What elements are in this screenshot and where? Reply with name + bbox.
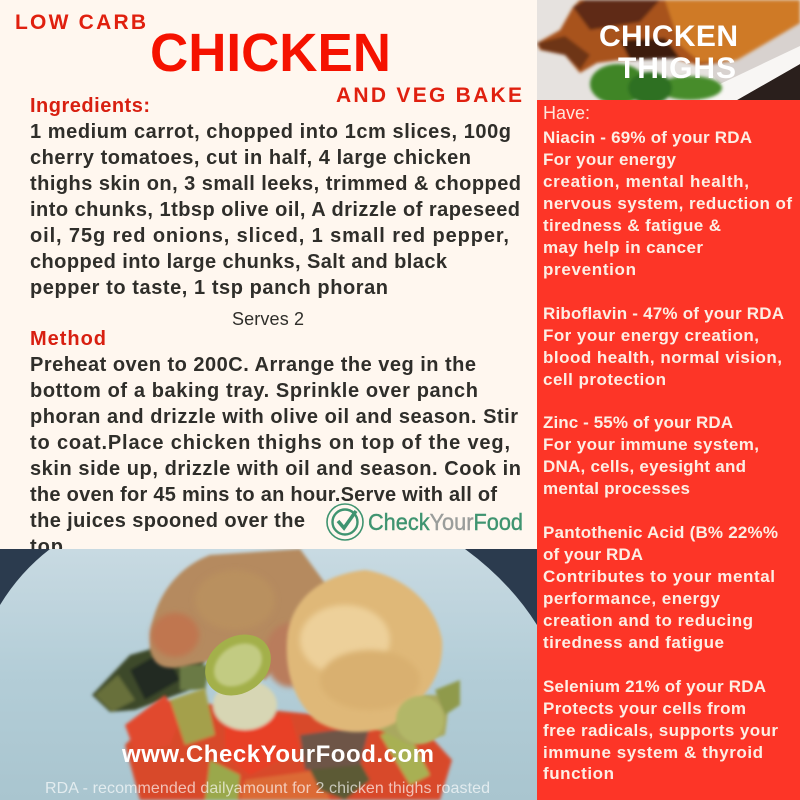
- nutrient: niacin: may help in cancer: [543, 238, 703, 257]
- text block: method: the juices spooned over the: [30, 510, 305, 532]
- text: have: Have:: [543, 103, 590, 123]
- text block: ingredients: chopped into large chunks, Salt and black: [30, 251, 448, 273]
- text block: method: [30, 328, 521, 558]
- nutrient: niacin: nervous system, reduction of: [543, 194, 792, 213]
- nutrient: selenium: free radicals, supports your: [543, 721, 778, 740]
- text block: method: bottom of a baking tray. Sprinkle over panch: [30, 380, 478, 402]
- vegetables, bottom: [125, 680, 460, 800]
- nutrient: pantothenic acid: tiredness and fatigue: [543, 633, 724, 652]
- nutrient: pantothenic acid: creation and to reducing: [543, 611, 753, 630]
- nutrient: zinc: DNA, cells, eyesight and: [543, 457, 746, 476]
- logo wordmark: CheckYourFood: [368, 509, 523, 535]
- title: low carb chicken and veg bake: [15, 11, 522, 107]
- text block: ingredients: thighs skin on, 3 small leeks, trimmed & chopped: [30, 173, 521, 195]
- nutrient: riboflavin: cell protection: [543, 370, 666, 389]
- text block: method: the oven for 45 mins to an hour.Serve with all of: [30, 484, 497, 506]
- heading: chicken thighs: CHICKEN: [599, 20, 738, 53]
- nutrient: selenium: Selenium 21% of your RDA: [543, 677, 766, 696]
- nutrient: niacin: For your energy: [543, 150, 677, 169]
- url caption: www.CheckYourFood.com: [121, 741, 434, 768]
- dark greens: [92, 645, 210, 712]
- text block: ingredients: 1 medium carrot, chopped into 1cm slices, 100g: [30, 121, 511, 143]
- text block: ingredients: Ingredients:: [30, 95, 150, 117]
- nutrient: pantothenic acid: of your RDA: [543, 545, 643, 564]
- nutrient: selenium: immune system & thyroid: [543, 743, 763, 762]
- nutrient: niacin: [543, 128, 792, 279]
- nutrient: pantothenic acid: Contributes to your mental: [543, 567, 775, 586]
- golden crispy chicken thigh: [287, 570, 442, 732]
- text block: ingredients: cherry tomatoes, cut in half, 4 large chicken: [30, 147, 471, 169]
- leek slice: [205, 634, 271, 696]
- nutrient: niacin: tiredness & fatigue &: [543, 216, 721, 235]
- text block: method: skin side up, drizzle with oil and season. Cook in: [30, 458, 521, 480]
- nutrient: selenium: Protects your cells from: [543, 699, 746, 718]
- nutrient: pantothenic acid: [543, 523, 778, 652]
- nutrient: niacin: creation, mental health,: [543, 172, 749, 191]
- heading: chicken thighs: [600, 25, 736, 78]
- panel: nutrients: [537, 100, 800, 800]
- text block: ingredients: [30, 95, 521, 299]
- title: low carb chicken and veg bake: AND VEG BAKE: [336, 84, 522, 107]
- text block: ingredients: into chunks, 1tbsp olive oil, A drizzle of rapeseed: [30, 199, 520, 221]
- text block: method: Method: [30, 328, 106, 350]
- title: low carb chicken and veg bake: LOW CARB: [15, 11, 146, 34]
- text block: ingredients: pepper to taste, 1 tsp panch phoran: [30, 277, 388, 299]
- nutrient: riboflavin: Riboflavin - 47% of your RDA: [543, 304, 784, 323]
- nutrient: zinc: [543, 413, 759, 498]
- text: serves 2: Serves 2: [232, 309, 304, 329]
- nutrient: niacin: Niacin - 69% of your RDA: [543, 128, 752, 147]
- nutrient: pantothenic acid: performance, energy: [543, 589, 721, 608]
- nutrient: riboflavin: blood health, normal vision,: [543, 348, 782, 367]
- text block: ingredients: oil, 75g red onions, sliced, 1 small red pepper,: [30, 225, 509, 247]
- nutrient: selenium: [543, 677, 778, 783]
- text block: method: phoran and drizzle with olive oil and season. Stir: [30, 406, 518, 428]
- leek slice, right: [396, 696, 444, 744]
- footnote: RDA - recommended dailyamount for 2 chicken thighs roasted: [45, 780, 490, 797]
- nutrient: pantothenic acid: Pantothenic Acid (B% 22%%: [543, 523, 778, 542]
- nutrient: riboflavin: For your energy creation,: [543, 326, 759, 345]
- icon: check mark badge: [327, 504, 363, 540]
- title: low carb chicken and veg bake: CHICKEN: [150, 23, 391, 83]
- nutrient: zinc: For your immune system,: [543, 435, 759, 454]
- nutrient: zinc: Zinc - 55% of your RDA: [543, 413, 733, 432]
- text block: method: Preheat oven to 200C. Arrange the veg in the: [30, 354, 476, 376]
- heading: chicken thighs: THIGHS: [618, 52, 736, 85]
- chicken thigh, left: [150, 549, 330, 680]
- text block: method: to coat.Place chicken thighs on top of the veg,: [30, 432, 510, 454]
- photo: roast chicken thighs with basil: [537, 0, 800, 104]
- photo: chicken and veg bake on a plate: [0, 549, 537, 800]
- nutrient: riboflavin: [543, 304, 784, 389]
- nutrient: niacin: prevention: [543, 260, 636, 279]
- logo: check your food: [327, 504, 523, 540]
- nutrient: zinc: mental processes: [543, 479, 690, 498]
- text block: method: top: [30, 536, 63, 558]
- nutrient: selenium: function: [543, 764, 614, 783]
